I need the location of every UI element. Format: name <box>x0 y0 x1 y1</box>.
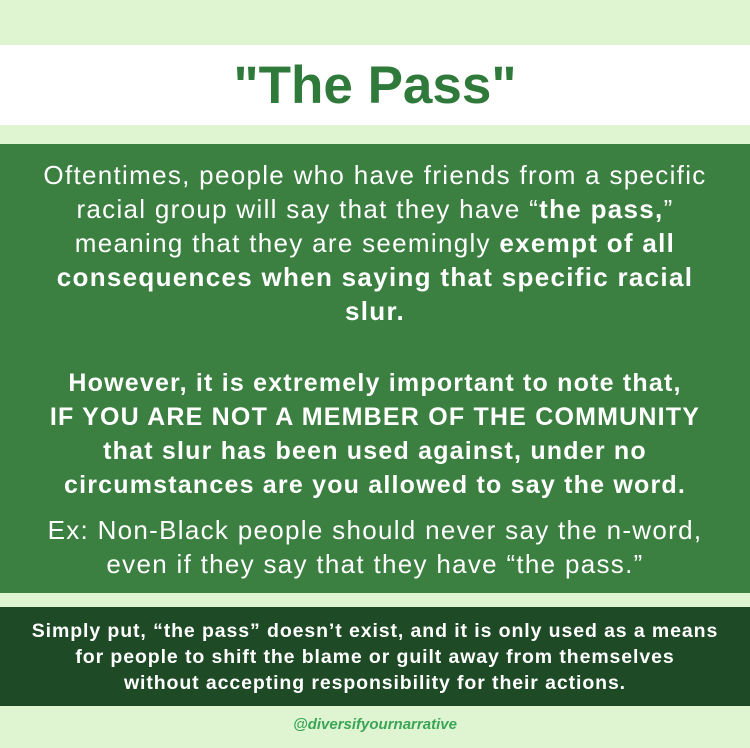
text: paragraph 2 <box>50 369 700 499</box>
text: paragraph 2: that slur has been used against, under no <box>103 437 647 465</box>
panel: conclusion <box>0 607 750 706</box>
text: paragraph 1: racial group will say that they have “the pass,” <box>76 194 674 224</box>
text: paragraph 2: IF YOU ARE NOT A MEMBER OF THE COMMUNITY <box>50 403 700 431</box>
text: conclusion: for people to shift the blame or guilt away from themselves <box>75 646 675 668</box>
text: paragraph 2: circumstances are you allowed to say the word. <box>64 471 686 499</box>
handle: @diversifyournarrative <box>293 716 457 733</box>
text: paragraph 1 <box>43 160 707 326</box>
panel: main explanation <box>0 144 750 593</box>
text: paragraph 1: meaning that they are seemingly exempt of all <box>75 228 675 258</box>
text: paragraph 3: even if they say that they have “the pass.” <box>106 549 644 579</box>
text: paragraph 2: However, it is extremely important to note that, <box>68 369 682 397</box>
text: paragraph 1: slur. <box>345 296 405 326</box>
text: paragraph 1: consequences when saying that specific racial <box>57 262 693 292</box>
text: paragraph 1: Oftentimes, people who have friends from a specific <box>43 160 707 190</box>
text: conclusion <box>32 620 718 694</box>
text: paragraph 3: Ex: Non-Black people should never say the n-word, <box>48 515 702 545</box>
text: conclusion: without accepting responsibility for their actions. <box>124 672 626 694</box>
text: conclusion: Simply put, “the pass” doesn’t exist, and it is only used as a means <box>32 620 718 642</box>
title band <box>0 45 750 125</box>
title: "The Pass" <box>234 56 516 115</box>
text: paragraph 3 <box>48 515 702 579</box>
